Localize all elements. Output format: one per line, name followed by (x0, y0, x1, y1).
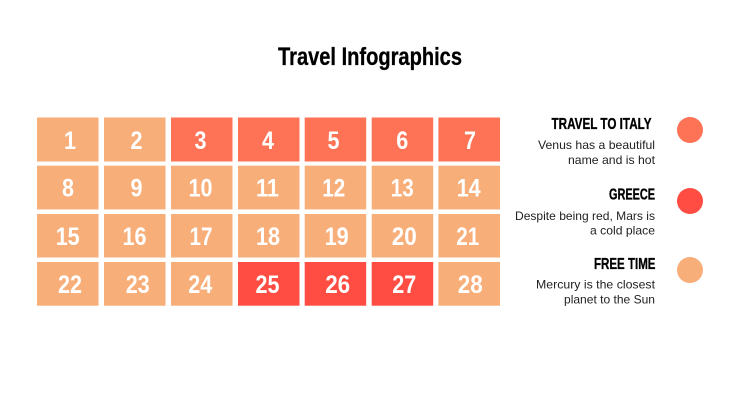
row 2: 9 (130, 175, 142, 203)
row 1: 5 (328, 127, 340, 155)
row 4: 22 (58, 271, 82, 299)
legend: free time (536, 256, 703, 306)
row 2: 11 (256, 175, 279, 203)
row 1: 4 (262, 127, 274, 155)
row 1 (37, 118, 500, 162)
row 3: 15 (56, 223, 80, 251)
icon: peach dot (677, 257, 703, 283)
row 3: 21 (456, 223, 479, 251)
title: Travel Infographics (278, 43, 462, 71)
legend: travel to italy: name and is hot (568, 153, 656, 167)
row 1: 6 (396, 127, 408, 155)
legend: greece: Despite being red, Mars is (515, 209, 655, 223)
row 4: 26 (325, 271, 350, 299)
row 3: 16 (122, 223, 146, 251)
row 1: 1 (64, 127, 76, 155)
row 3: 20 (392, 223, 417, 251)
legend: travel to italy: Venus has a beautiful (538, 138, 655, 152)
row 4: 23 (126, 271, 150, 299)
row 2: 14 (457, 175, 481, 203)
legend: free time: Mercury is the closest (536, 278, 656, 292)
calendar grid (37, 118, 500, 306)
row 1: 2 (130, 127, 142, 155)
row 2: 10 (188, 175, 212, 203)
row 3: 19 (325, 223, 349, 251)
legend: travel to italy: TRAVEL TO ITALY (552, 116, 652, 133)
row 4 (37, 262, 500, 306)
row 1: 3 (194, 127, 206, 155)
row 3 (37, 214, 500, 258)
row 2: 13 (391, 175, 414, 203)
legend: greece: GREECE (609, 186, 655, 204)
row 3: 18 (256, 223, 280, 251)
row 1: 7 (464, 127, 476, 155)
row 3: 17 (190, 223, 212, 251)
row 2: 8 (62, 175, 74, 203)
legend: free time: planet to the Sun (564, 292, 655, 306)
legend: free time: FREE TIME (594, 256, 656, 273)
row 4: 27 (392, 271, 416, 299)
row 4: 25 (256, 271, 280, 299)
legend: greece: a cold place (590, 224, 655, 238)
icon: coral dot (677, 117, 703, 143)
row 2 (37, 166, 500, 209)
legend: travel to italy (538, 116, 703, 167)
row 4: 24 (188, 271, 212, 299)
icon: red dot (677, 188, 703, 214)
row 2: 12 (322, 175, 345, 203)
legend: greece (515, 186, 703, 238)
row 4: 28 (458, 271, 483, 299)
